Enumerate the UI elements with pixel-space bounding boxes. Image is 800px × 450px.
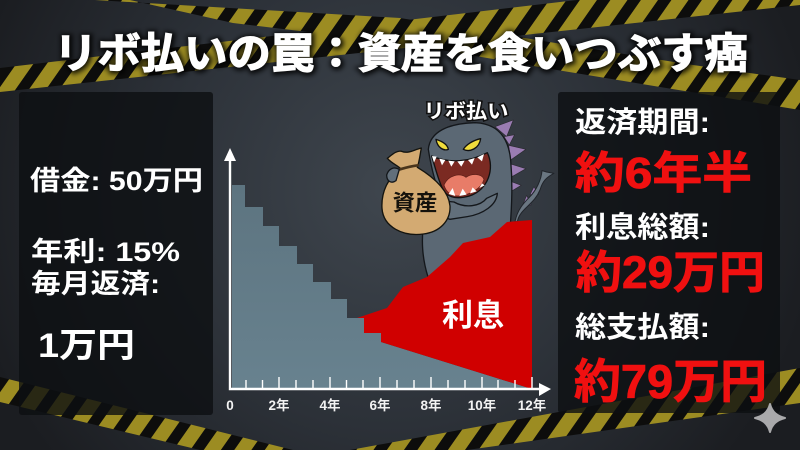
chart: remaining balance and interest	[224, 100, 554, 413]
axes	[224, 148, 551, 396]
total interest value: 約29万円	[576, 247, 765, 298]
arm	[440, 193, 497, 219]
interest area	[357, 220, 532, 389]
monthly payment label: 毎月返済:	[31, 269, 160, 299]
repayment period value: 約6年半	[575, 149, 752, 198]
x axis labels: 8年	[420, 397, 442, 413]
interest rate: 年利: 15%	[31, 237, 180, 267]
x axis labels	[226, 397, 546, 413]
title: リボ払いの罠：資産を食いつぶす癌	[54, 30, 748, 77]
money bag	[382, 148, 450, 234]
total paid label: 総支払額:	[575, 311, 710, 344]
monster label: リボ払い	[424, 100, 508, 123]
bag hand	[387, 168, 399, 182]
tail	[515, 171, 554, 222]
bag label: 資産	[393, 191, 437, 216]
panel: repayment results	[558, 92, 780, 413]
icon: sparkle	[755, 404, 785, 432]
x axis labels: 0	[226, 398, 234, 413]
body and head	[422, 123, 512, 277]
total interest label: 利息総額:	[575, 211, 710, 244]
total paid value: 約79万円	[574, 355, 767, 408]
x axis labels: 10年	[468, 397, 496, 413]
interest label: 利息	[442, 298, 504, 333]
monster character	[382, 120, 554, 277]
x axis labels: 4年	[319, 397, 341, 413]
spikes	[495, 120, 539, 205]
x axis labels: 6年	[369, 397, 391, 413]
panel: loan conditions	[19, 92, 213, 415]
balance area	[232, 185, 532, 389]
x axis labels: 2年	[268, 397, 290, 413]
title: リボ払いの罠：資産を食いつぶす癌	[55, 31, 749, 78]
teeth	[432, 154, 485, 196]
tongue	[444, 175, 484, 196]
loan amount: 借金: 50万円	[30, 166, 203, 196]
monthly payment value: 1万円	[38, 327, 135, 365]
mouth	[432, 153, 490, 198]
repayment period label: 返済期間:	[575, 106, 710, 139]
eyes	[436, 139, 448, 150]
x axis labels: 12年	[518, 397, 546, 413]
